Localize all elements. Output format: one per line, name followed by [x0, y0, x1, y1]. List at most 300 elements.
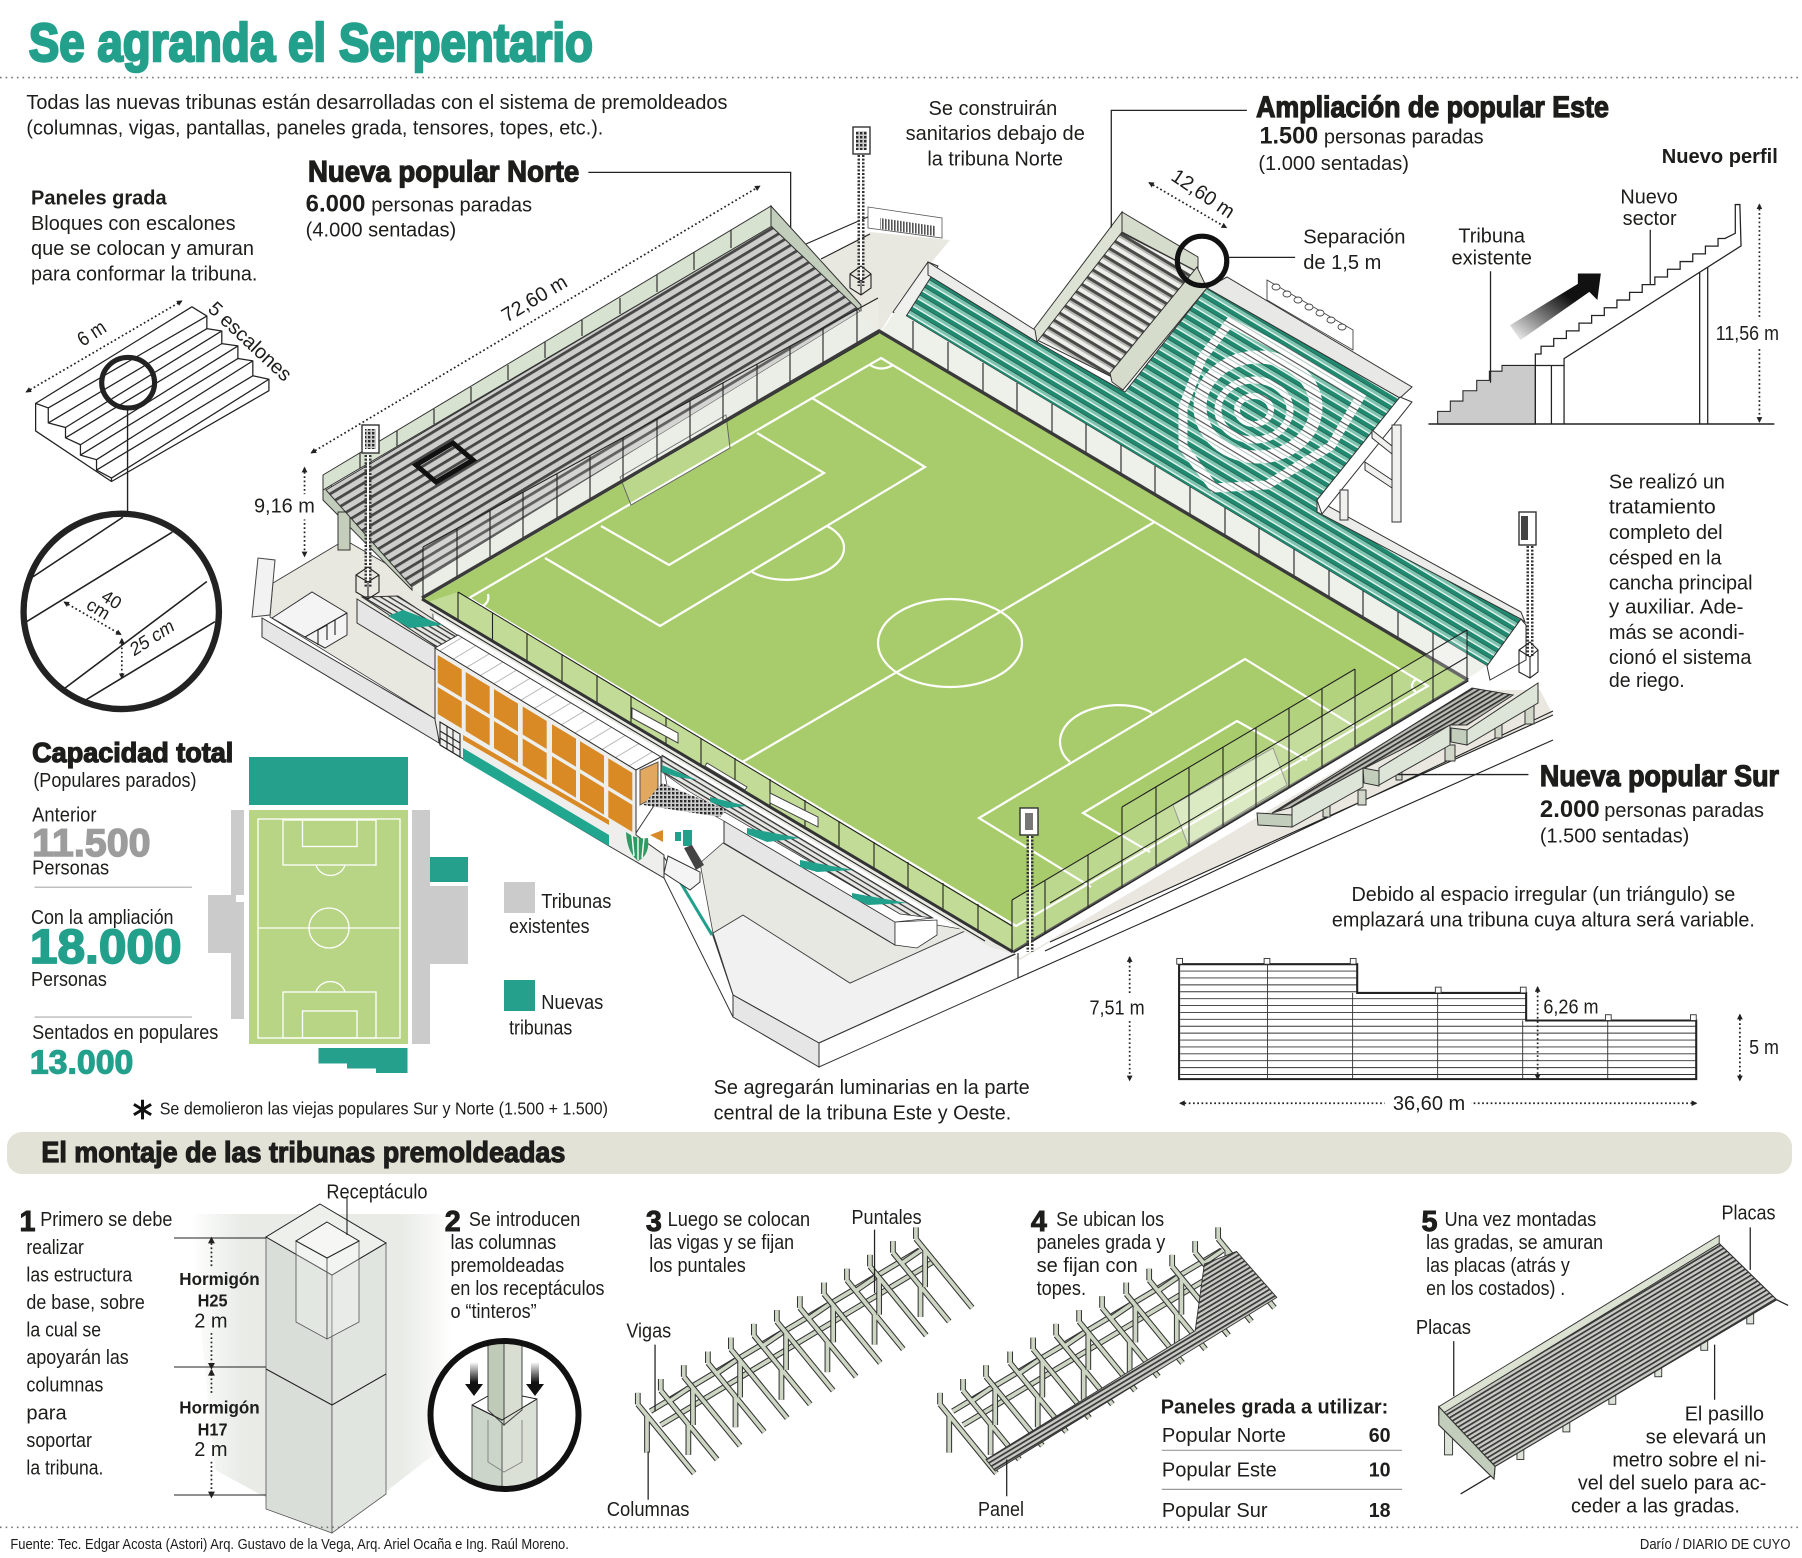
- description: para conformar la tribuna.: [31, 263, 257, 285]
- legend labels: Tribunas: [541, 891, 611, 913]
- pitch markings: [469, 358, 1428, 926]
- 9,16 m label: 9,16 m: [254, 496, 315, 518]
- note: césped: y auxiliar. Ade-: [1609, 597, 1743, 619]
- floodlight south: [1020, 808, 1038, 952]
- note: césped: cancha principal: [1609, 573, 1753, 595]
- note: césped: cionó el sistema: [1609, 647, 1752, 669]
- row Este: Popular Este: [1162, 1460, 1277, 1482]
- label nuevo sector: sector: [1623, 208, 1677, 230]
- label tribuna existente: Tribuna: [1458, 225, 1526, 247]
- teal stripe: [463, 748, 609, 846]
- table heading: Paneles grada a utilizar:: [1161, 1397, 1388, 1419]
- step 1 text: para: [26, 1402, 67, 1424]
- separation label: [1303, 227, 1405, 274]
- numbers: (4.000 sentadas): [306, 220, 456, 242]
- column top: [266, 1204, 386, 1275]
- label nuevo sector: Nuevo: [1620, 186, 1678, 208]
- step 2 text: en los receptáculos: [450, 1278, 604, 1300]
- 5 m label: 5 m: [1749, 1037, 1779, 1059]
- note: luminarias: central de la tribuna Este y Oeste.: [714, 1102, 1011, 1124]
- concrete H25: H25: [198, 1291, 228, 1311]
- reference lines: [174, 1238, 266, 1495]
- source: Fuente: Tec. Edgar Acosta (Astori) Arq. Gustavo de la Vega, Arq. Ariel Ocaña e Ing. Raúl Moreno.: [10, 1536, 569, 1553]
- legend swatch: new stands: [504, 980, 535, 1011]
- step 5 labels: Placas: [1416, 1317, 1471, 1339]
- previous capacity: Anterior: [32, 805, 97, 827]
- step 2 text: o “tinteros”: [450, 1301, 537, 1323]
- 7,51 m label: 7,51 m: [1089, 998, 1145, 1020]
- step 5 text: las gradas, se amuran: [1426, 1232, 1603, 1254]
- south seating: [1272, 688, 1513, 813]
- existing stands east: [412, 810, 468, 1044]
- orange stripe: [463, 735, 609, 825]
- step 1 text: la cual se: [26, 1320, 101, 1342]
- step 4 text: topes.: [1037, 1278, 1086, 1300]
- step 3 labels: Columnas: [607, 1499, 690, 1521]
- previous capacity: Personas: [32, 858, 109, 880]
- note: espacio irregular: [1332, 884, 1755, 931]
- south panels: [1292, 683, 1538, 827]
- near side strip behind the field: [422, 599, 1013, 954]
- 6 m label: 6 m: [73, 317, 111, 351]
- step 3 labels: Puntales: [852, 1207, 922, 1229]
- centre circle: [878, 599, 1022, 687]
- step 4 label: Panel: [978, 1499, 1024, 1521]
- step 1 text: columnas: [26, 1375, 103, 1397]
- concrete H17: 2 m: [194, 1439, 228, 1461]
- 40 cm label: 40: [98, 586, 125, 613]
- right end wall: [1487, 619, 1526, 680]
- note: pasillo: vel del suelo para ac-: [1578, 1472, 1766, 1494]
- step 2 text: premoldeadas: [450, 1255, 564, 1277]
- ground: back plaza: [821, 232, 950, 332]
- side rail of upper sector: [1317, 397, 1412, 514]
- rear panels: [323, 206, 772, 490]
- step 4 text: se fijan con: [1037, 1255, 1138, 1277]
- end panel: [636, 757, 661, 833]
- step 3 frame: [638, 1227, 972, 1473]
- magnifier stem: [127, 408, 129, 514]
- step 4 pointer: [1006, 1459, 1008, 1496]
- left end rail: [893, 262, 938, 318]
- row Sur: 18: [1369, 1500, 1391, 1522]
- black marked panel: [416, 443, 473, 482]
- concrete H17: H17: [198, 1419, 228, 1439]
- concrete H25: [179, 1269, 260, 1332]
- note: pasillo: se elevará un: [1646, 1426, 1766, 1448]
- note: pasillo: ceder a las gradas.: [1571, 1495, 1740, 1517]
- club crest: [626, 832, 648, 861]
- step 5 text: 5: [1422, 1206, 1438, 1238]
- existing stands west: [208, 810, 244, 1019]
- step 2 text: [445, 1206, 604, 1323]
- row Norte: 60: [1369, 1425, 1391, 1447]
- legend labels: existentes: [509, 916, 590, 938]
- column: [488, 1330, 504, 1425]
- 36,60 m label: 36,60 m: [1393, 1093, 1465, 1115]
- slab inner floor: [700, 843, 967, 983]
- seated capacity: 13.000: [30, 1044, 133, 1081]
- height dimensions: [210, 1239, 212, 1496]
- 72,60 m label: 72,60 m: [498, 271, 571, 327]
- supports: [1340, 425, 1401, 522]
- note: pasillo: [1571, 1403, 1766, 1517]
- 72,60 m dimension: [311, 186, 760, 453]
- step 4 text: paneles grada y: [1037, 1232, 1166, 1254]
- back rail: [928, 262, 1037, 342]
- numbers: 6.000: [306, 190, 365, 217]
- south goal: [1173, 748, 1287, 845]
- side dugouts: [632, 708, 818, 827]
- step 5 pointers: [1454, 1227, 1750, 1400]
- roof lights: [1267, 280, 1353, 350]
- description: Bloques con escalones: [31, 213, 236, 235]
- step 1 text: [20, 1206, 172, 1479]
- 25 cm dimension: [121, 639, 123, 678]
- title: Se agranda el Serpentario: [29, 13, 593, 73]
- step 1 text: realizar: [26, 1237, 84, 1259]
- stripes: [1180, 964, 1696, 1079]
- legend labels: tribunas: [509, 1017, 572, 1039]
- numbers: 1.500: [1260, 123, 1318, 150]
- table: Paneles grada a utilizar: [1161, 1397, 1402, 1522]
- building behind north stand: [868, 207, 942, 238]
- step 4 frame: [940, 1227, 1277, 1473]
- dark seats: [643, 783, 727, 817]
- orange triangle: [650, 830, 663, 842]
- magnifier big ring: [17, 514, 219, 724]
- north fence: [422, 298, 879, 599]
- callout: Nueva popular Sur: [1397, 760, 1779, 847]
- step 1 text: las estructura: [26, 1264, 133, 1286]
- leader line: [1111, 110, 1247, 228]
- background haze: [190, 1214, 453, 1533]
- green stepped seating: [896, 275, 1521, 666]
- floodlight east: [1519, 512, 1538, 678]
- slab top: [713, 915, 1017, 1043]
- 5 escalones label: 5 escalones: [203, 298, 296, 386]
- seats: [1439, 1243, 1777, 1466]
- heading: Capacidad total: [32, 737, 233, 768]
- numbers: personas paradas: [1604, 800, 1764, 822]
- new north stand: [249, 757, 408, 805]
- south fence: [1012, 630, 1468, 952]
- pitch grass: [424, 333, 1468, 952]
- separation leader: [1227, 256, 1295, 258]
- label tribuna existente: existente: [1451, 247, 1532, 269]
- new south stand: [318, 1048, 408, 1073]
- supports: [1323, 704, 1534, 817]
- stand front white: [662, 760, 933, 922]
- north field edge: [422, 331, 1468, 680]
- stadium illustration: [252, 127, 1553, 1067]
- new capacity: [30, 907, 182, 991]
- separation ring: [1177, 236, 1227, 286]
- row Sur: Popular Sur: [1162, 1500, 1268, 1522]
- panel strip: [986, 1251, 1277, 1471]
- gray sector side rail: [1033, 212, 1122, 342]
- new east sector: [430, 857, 468, 882]
- dimension arrowheads: [208, 1237, 215, 1499]
- ramp: [664, 857, 733, 1017]
- collar: [472, 1396, 537, 1420]
- roof: [435, 635, 661, 770]
- section band: [7, 1132, 1792, 1174]
- south penalty areas: [979, 659, 1357, 887]
- step 3 labels: Vigas: [626, 1321, 671, 1343]
- previous capacity: 11.500: [32, 822, 151, 865]
- concrete H17: [179, 1398, 260, 1461]
- orange panels: [438, 655, 632, 832]
- step 4 text: Se ubican los: [1056, 1209, 1164, 1231]
- note: sanitarios: Se construirán: [929, 98, 1057, 120]
- numbers: [1258, 123, 1484, 175]
- right side rail: [771, 206, 861, 312]
- 6,26 m label: 6,26 m: [1543, 997, 1599, 1019]
- note: césped: Se realizó un: [1609, 471, 1725, 493]
- support column: [338, 512, 350, 550]
- new capacity: 18.000: [30, 920, 182, 974]
- height label: 11,56 m: [1716, 323, 1779, 345]
- columns: [1445, 1312, 1754, 1459]
- orange building: [435, 635, 727, 878]
- column left face: [266, 1237, 332, 1533]
- corner arcs: [481, 365, 1416, 692]
- entrance block: [664, 856, 700, 890]
- heading: Ampliación de popular Este: [1256, 91, 1609, 124]
- step 1 text: soportar: [26, 1430, 92, 1452]
- top dotted rule: [0, 77, 1802, 79]
- note: césped: tratamiento: [1609, 497, 1716, 519]
- side wall: [323, 477, 412, 590]
- callout: Ampliación de popular Este: [1111, 91, 1609, 228]
- step 5 text: las placas (atrás y: [1426, 1255, 1571, 1277]
- south tribune: [1257, 683, 1538, 827]
- separation label: de 1,5 m: [1303, 252, 1381, 274]
- heading: Nueva popular Norte: [308, 156, 579, 189]
- stepped block: [36, 307, 269, 482]
- note: sanitarios: sanitarios debajo de: [906, 123, 1085, 145]
- step 1 text: apoyarán las: [26, 1347, 129, 1369]
- description: [31, 213, 257, 285]
- legend labels: Nuevas: [541, 992, 603, 1014]
- 36,60 m dimension: [1180, 1102, 1696, 1104]
- label tribuna existente: [1451, 225, 1532, 269]
- west plaza wall: [262, 618, 439, 743]
- step 1 text: 1: [20, 1206, 36, 1238]
- concrete H17: Hormigón: [179, 1398, 260, 1418]
- step 2 text: Se introducen: [469, 1209, 580, 1231]
- ground line: [1428, 423, 1774, 425]
- touchlines: [469, 358, 1428, 926]
- south end caps: [1257, 728, 1467, 827]
- pointer existing: [1490, 271, 1492, 383]
- note: césped: de riego.: [1609, 670, 1685, 692]
- capacity mini map: [208, 757, 468, 1073]
- south field edge: [1013, 680, 1553, 978]
- floodlight north west: [356, 425, 379, 599]
- teal doors: [675, 832, 681, 841]
- receptacle opening: [296, 1222, 359, 1258]
- receptacle pointer: [346, 1198, 348, 1235]
- pointer new: [1649, 230, 1651, 285]
- 40 cm dimension: [64, 602, 121, 634]
- subheading: (Populares parados): [33, 770, 197, 792]
- footnote: Se demolieron las viejas populares Sur y Norte (1.500 + 1.500): [160, 1099, 608, 1119]
- step 1 column diagram: [174, 1198, 453, 1533]
- receptacle: [296, 1241, 359, 1339]
- ramp teal rail: [667, 860, 712, 935]
- facade base: [435, 648, 664, 878]
- magnifier small ring: [102, 357, 155, 408]
- stairs: [684, 845, 704, 870]
- plaza block: [272, 592, 347, 648]
- outline: [1179, 964, 1696, 1079]
- lines behind north stand: [806, 216, 870, 259]
- note: espacio irregular: emplazará una tribuna cuya altura será variable.: [1332, 909, 1755, 931]
- step 3 labels: [607, 1207, 922, 1521]
- leader line: [588, 172, 791, 228]
- concrete H25: 2 m: [194, 1310, 228, 1332]
- footnote star: [134, 1100, 151, 1119]
- 6,26 m dimension: [1537, 987, 1539, 1079]
- step 2 text: 2: [445, 1206, 461, 1238]
- note: pasillo: El pasillo: [1685, 1403, 1764, 1425]
- step 5 tribune: [1439, 1235, 1788, 1494]
- step 1 text: Primero se debe: [40, 1209, 172, 1231]
- legend labels: [509, 891, 611, 1039]
- numbers: [1540, 796, 1764, 847]
- row Este: [1162, 1460, 1391, 1482]
- new stepped structure: [1535, 205, 1741, 365]
- heading: Nuevo perfil: [1662, 146, 1778, 168]
- top posts: [1177, 958, 1696, 1020]
- numbers: (1.000 sentadas): [1258, 153, 1409, 175]
- new capacity: Con la ampliación: [31, 907, 174, 929]
- note: césped: más se acondi-: [1609, 622, 1744, 644]
- separation label: Separación: [1303, 227, 1405, 249]
- stand seat stripes: [662, 755, 933, 918]
- note: luminarias: [714, 1077, 1030, 1124]
- 6 m dimension: [26, 301, 182, 392]
- gray sector: [1037, 232, 1198, 377]
- column right face: [332, 1243, 386, 1533]
- ground lines: [1461, 1300, 1788, 1494]
- note: espacio irregular: Debido al espacio irregular (un triángulo) se: [1351, 884, 1735, 906]
- 25 cm label: 25 cm: [124, 615, 178, 660]
- step 4 text: 4: [1031, 1206, 1047, 1238]
- section heading: El montaje de las tribunas premoldeadas: [41, 1137, 565, 1169]
- previous capacity: [32, 805, 151, 880]
- bottom dotted rule: [0, 1526, 1802, 1528]
- concrete H25: Hormigón: [179, 1269, 260, 1289]
- south west stand slab: [664, 821, 1018, 1067]
- numbers: personas paradas: [1324, 127, 1484, 149]
- step 5 labels: [1416, 1202, 1776, 1339]
- seam between concrete grades: [266, 1369, 386, 1405]
- south stand elevation: [1177, 958, 1696, 1079]
- step 3 text: Luego se colocan: [668, 1209, 810, 1231]
- rear walkway: [1207, 277, 1412, 398]
- step 2 text: las columnas: [450, 1232, 556, 1254]
- 9,16 m dimension: [304, 468, 306, 556]
- slab side wall: [733, 995, 819, 1067]
- north penalty areas: [545, 398, 925, 626]
- step 1 text: de base, sobre: [26, 1292, 145, 1314]
- note: sanitarios: [906, 98, 1085, 170]
- gray sector rear wall: [1122, 212, 1198, 272]
- note: césped: césped en la: [1609, 547, 1722, 569]
- door grille: [440, 722, 460, 757]
- 12,60 m dimension: [1149, 183, 1226, 228]
- note: pasillo: metro sobre el ni-: [1612, 1449, 1766, 1471]
- inner socket: [488, 1420, 522, 1472]
- lower rear rail: [1317, 500, 1525, 622]
- near fence: [458, 592, 1012, 952]
- seated capacity: [30, 1022, 218, 1081]
- heading: Paneles grada: [31, 188, 167, 210]
- step 4 text: [1031, 1206, 1166, 1300]
- east tribune: [879, 212, 1526, 682]
- numbers: (1.500 sentadas): [1540, 825, 1689, 847]
- step 3 text: los puntales: [649, 1255, 746, 1277]
- divider wall: [1110, 267, 1207, 390]
- halfway line: [742, 522, 1154, 762]
- 5 m dimension: [1739, 1015, 1741, 1080]
- north goal: [620, 415, 730, 505]
- down arrow left: [465, 1362, 483, 1396]
- step 3 pointers: [648, 1230, 875, 1500]
- row Sur: [1162, 1500, 1391, 1522]
- panel: Capacidad total: [30, 737, 608, 1119]
- near side fence band: [428, 592, 1013, 952]
- step 3 text: [646, 1206, 810, 1277]
- row Este: 10: [1369, 1460, 1391, 1482]
- crest on the seats: [1183, 322, 1360, 488]
- step 5 text: [1422, 1206, 1603, 1300]
- plaza sign: [252, 558, 275, 617]
- stepped seating stripes: [326, 226, 861, 587]
- stand rear wall: [724, 821, 895, 945]
- row Norte: [1162, 1425, 1391, 1447]
- ground: west plaza: [270, 540, 437, 720]
- south strip: [1013, 690, 1553, 960]
- step 3 text: las vigas y se fijan: [649, 1232, 794, 1254]
- step 5 text: Una vez montadas: [1445, 1209, 1596, 1231]
- callout: Nueva popular Norte: [306, 156, 791, 242]
- new capacity: Personas: [31, 969, 107, 991]
- note: sanitarios: la tribuna Norte: [927, 148, 1063, 170]
- heading: Nueva popular Sur: [1540, 760, 1779, 793]
- stand end block: [895, 920, 937, 948]
- front wall: [879, 310, 1487, 682]
- label receptáculo: Receptáculo: [326, 1182, 428, 1204]
- intro text: Todas las nuevas tribunas están desarrolladas con el sistema de premoldeados: [26, 92, 727, 114]
- numbers: [306, 190, 532, 242]
- numbers: personas paradas: [371, 194, 532, 216]
- 12,60 m label: 12,60 m: [1167, 165, 1238, 223]
- rear plates: [1439, 1235, 1719, 1416]
- mini pitch: [249, 810, 408, 1044]
- seated capacity: Sentados en populares: [32, 1022, 218, 1044]
- row Norte: Popular Norte: [1162, 1425, 1286, 1447]
- label nuevo sector: [1620, 186, 1678, 230]
- receptacle block: [472, 1404, 502, 1486]
- description: que se colocan y amuran: [31, 238, 254, 260]
- teal seat patches: [662, 765, 907, 905]
- numbers: 2.000: [1540, 796, 1600, 823]
- note: luminarias: Se agregarán luminarias en la parte: [714, 1077, 1030, 1099]
